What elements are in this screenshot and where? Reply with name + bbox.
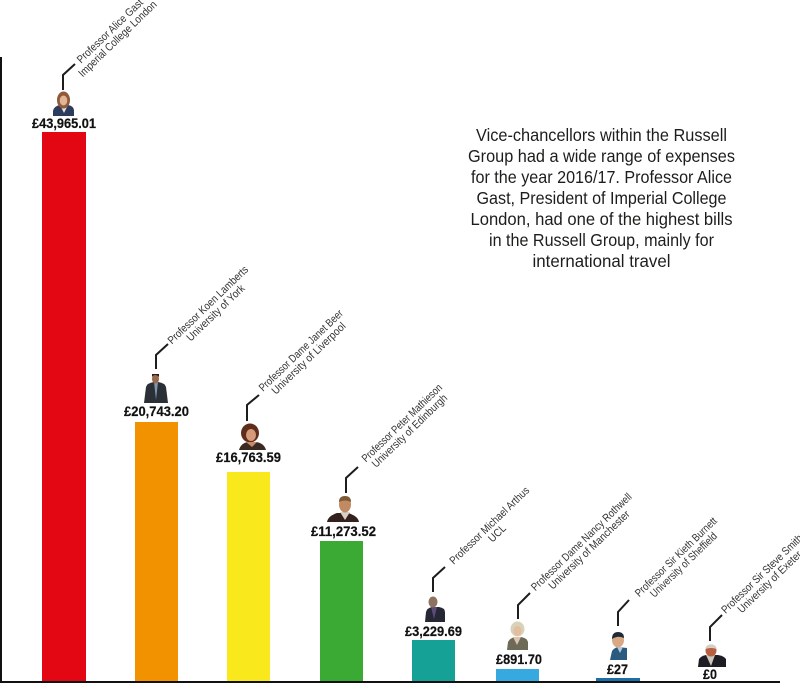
name label: Professor Peter Mathieson <box>360 382 445 465</box>
value: £0: £0 <box>703 667 717 682</box>
column: Peter Mathieson <box>311 382 453 681</box>
value: £11,273.52: £11,273.52 <box>311 524 376 539</box>
bar: £16,763.59 <box>227 472 270 681</box>
bar: £891.70 <box>496 669 539 681</box>
value: £3,229.69: £3,229.69 <box>405 624 462 639</box>
text block: introduction: Group had a wide range of expenses <box>468 146 735 166</box>
column: Sir Kieth Burnett <box>596 515 727 681</box>
value: £891.70: £891.70 <box>496 652 542 667</box>
value: £20,743.20: £20,743.20 <box>124 404 189 419</box>
text block: introduction <box>468 125 735 271</box>
portrait: Michael Arthur <box>425 596 445 622</box>
bar: £20,743.20 <box>135 422 178 681</box>
column: Dame Janet Beer <box>216 307 354 681</box>
portrait: Janet Beer <box>239 424 266 450</box>
leader line <box>618 600 629 626</box>
name label: University of York <box>184 282 248 344</box>
name label: Professor Dame Janet Beer <box>257 307 346 394</box>
leader line <box>346 467 358 493</box>
name label: Professor Sir Kieth Burnett <box>633 515 720 600</box>
column: Sir Steve Smith <box>698 533 800 682</box>
leader line <box>518 593 530 619</box>
leader line <box>710 615 722 641</box>
text block: introduction: Gast, President of Imperial College <box>476 188 726 208</box>
y axis <box>0 57 2 683</box>
text block: introduction: for the year 2016/17. Professor Alice <box>471 167 732 187</box>
value: £27: £27 <box>607 662 628 677</box>
name label: University of Manchester <box>546 508 633 592</box>
portrait: Kieth Burnett <box>610 632 627 660</box>
bar: £27 <box>596 678 640 681</box>
bar: £43,965.01 <box>42 132 86 681</box>
portrait: Steve Smith <box>698 644 726 667</box>
column: Alice Gast <box>32 0 160 681</box>
text block: introduction: Vice-chancellors within the Russell <box>476 125 727 145</box>
name label: Professor Dame Nancy Rothwell <box>529 491 635 594</box>
value: £16,763.59: £16,763.59 <box>216 450 281 465</box>
name label: University of Liverpool <box>270 320 348 397</box>
column: Koen Lamberts <box>124 264 259 681</box>
name label: UCL <box>486 523 509 545</box>
text block: introduction: London, had one of the highest bills <box>470 209 733 229</box>
portrait: Alice Gast <box>53 92 74 116</box>
portrait: Nancy Rothwell <box>507 622 528 650</box>
name label: University of Edinburgh <box>370 392 450 470</box>
portrait: Peter Mathieson <box>327 496 359 522</box>
bar: £11,273.52 <box>320 541 363 681</box>
leader line <box>433 567 445 592</box>
name label: University of Sheffield <box>648 530 720 600</box>
portrait: Koen Lamberts <box>144 374 168 403</box>
bar: £3,229.69 <box>412 640 455 681</box>
value: £43,965.01: £43,965.01 <box>32 116 96 131</box>
text block: introduction: in the Russell Group, mainly for <box>489 230 714 250</box>
column: Dame Nancy Rothwell <box>496 491 642 681</box>
text block: introduction: international travel <box>532 251 670 271</box>
name label: Professor Koen Lamberts <box>166 264 251 347</box>
x axis <box>0 681 780 683</box>
leader line <box>156 344 168 369</box>
leader line <box>63 64 75 90</box>
name label: Professor Michael Arthus <box>448 484 532 567</box>
column: Michael Arthur <box>405 484 540 681</box>
leader line <box>247 395 259 421</box>
